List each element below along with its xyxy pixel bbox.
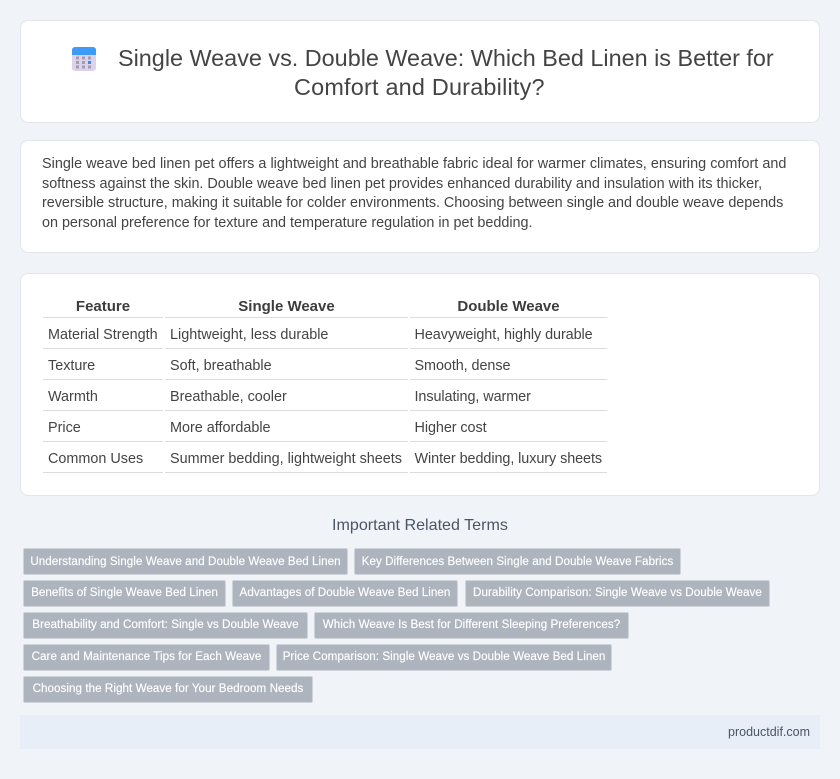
row: price: More affordable — [170, 420, 271, 436]
intro paragraph: reversible structure, making it suitable for colder environments. Choosing between single and double weave depends — [42, 195, 783, 211]
icon: calendar — [72, 47, 96, 71]
tag: Price Comparison: Single Weave vs Double Weave Bed Linen — [283, 650, 605, 663]
tag: Care and Maintenance Tips for Each Weave — [32, 650, 261, 663]
tag: Which Weave Is Best for Different Sleeping Preferences? — [323, 618, 620, 631]
row: common uses — [48, 451, 602, 467]
panel: comparison table — [20, 273, 820, 496]
tag list — [23, 548, 770, 703]
tag: Key Differences Between Single and Double Weave Fabrics — [362, 555, 673, 568]
title: Single Weave vs. Double Weave: Which Bed Linen is Better for — [118, 45, 774, 71]
tag — [23, 580, 226, 607]
row: warmth — [48, 389, 531, 405]
panel: title card — [20, 20, 820, 123]
table headers: Feature — [76, 298, 130, 315]
title — [118, 45, 774, 100]
row: common uses: Winter bedding, luxury sheets — [414, 451, 602, 467]
tag — [354, 548, 681, 575]
footer bar — [20, 715, 820, 749]
row: price: Price — [48, 420, 81, 436]
row: texture: Soft, breathable — [170, 358, 272, 374]
row: common uses: Summer bedding, lightweight sheets — [170, 451, 402, 467]
row: warmth: Breathable, cooler — [170, 389, 287, 405]
tag — [23, 612, 308, 639]
row: warmth: Warmth — [48, 389, 98, 405]
tag — [232, 580, 458, 607]
row: material strength — [48, 327, 593, 343]
row: material strength: Heavyweight, highly durable — [414, 327, 593, 343]
row: common uses: Common Uses — [48, 451, 143, 467]
tag — [23, 644, 270, 671]
tag — [23, 676, 313, 703]
row: texture: Texture — [48, 358, 95, 374]
tag — [465, 580, 770, 607]
row: material strength: Material Strength — [48, 327, 158, 343]
tag — [23, 548, 348, 575]
tag: Advantages of Double Weave Bed Linen — [240, 586, 450, 599]
row: warmth: Insulating, warmer — [414, 389, 531, 405]
row: price: Higher cost — [414, 420, 487, 436]
table headers: Single Weave — [238, 298, 335, 315]
title: Comfort and Durability? — [294, 74, 545, 100]
table headers — [76, 298, 560, 315]
tag: Understanding Single Weave and Double Weave Bed Linen — [30, 555, 341, 568]
row: texture: Smooth, dense — [414, 358, 510, 374]
tag: Choosing the Right Weave for Your Bedroom Needs — [33, 682, 303, 695]
heading: related terms: Important Related Terms — [332, 516, 508, 534]
row: material strength: Lightweight, less durable — [170, 327, 328, 343]
tag: Breathability and Comfort: Single vs Double Weave — [32, 618, 299, 631]
intro paragraph: softness against the skin. Double weave bed linen pet provides enhanced durability and insulation with its thicker, — [42, 176, 762, 192]
intro paragraph: on personal preference for texture and temperature regulation in pet bedding. — [42, 214, 532, 230]
tag — [276, 644, 612, 671]
tag — [314, 612, 629, 639]
intro paragraph: Single weave bed linen pet offers a lightweight and breathable fabric ideal for warmer climates, ensuring comfort and — [42, 156, 786, 172]
panel: intro text — [20, 140, 820, 253]
tag: Benefits of Single Weave Bed Linen — [31, 586, 218, 599]
table headers: Double Weave — [457, 298, 560, 315]
row: texture — [48, 358, 510, 374]
tag: Durability Comparison: Single Weave vs Double Weave — [473, 586, 762, 599]
footer source: productdif.com — [728, 725, 810, 739]
row: price — [48, 420, 487, 436]
intro paragraph — [42, 156, 786, 230]
